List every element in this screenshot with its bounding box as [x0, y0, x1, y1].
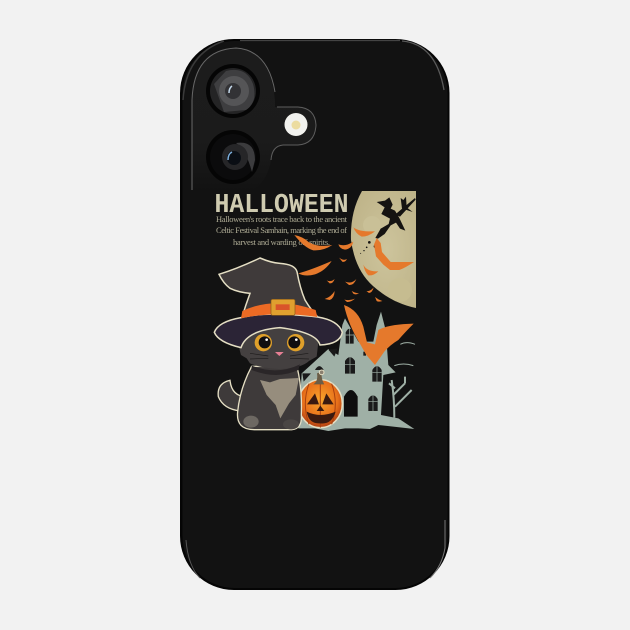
flying witch silhouette	[360, 197, 416, 254]
windows	[302, 329, 382, 411]
cat eyes	[255, 334, 304, 351]
moon	[351, 191, 416, 308]
wisps	[394, 343, 415, 366]
neck shadow	[252, 364, 300, 375]
chest fur	[260, 378, 299, 418]
orange bats over sky	[294, 235, 353, 275]
pumpkin	[298, 370, 342, 428]
description: harvest and warding off spirits.	[233, 237, 330, 247]
hat band	[241, 303, 317, 318]
buckle	[271, 299, 295, 315]
camera island	[192, 48, 316, 192]
window panes	[345, 328, 382, 411]
cat body	[237, 366, 301, 430]
bats on the moon	[353, 227, 414, 275]
upper camera lens	[206, 64, 260, 118]
cat head	[238, 327, 320, 369]
cat tail	[218, 380, 247, 411]
haunted house	[298, 305, 415, 431]
flash	[284, 113, 308, 136]
arched door	[344, 390, 358, 417]
lower camera lens	[206, 130, 260, 184]
hat brim	[214, 314, 342, 348]
dead tree	[389, 377, 412, 418]
phone case body	[180, 39, 450, 590]
whiskers	[250, 353, 309, 359]
paws	[243, 416, 259, 428]
description: Celtic Festival Samhain, marking the end of	[216, 225, 347, 235]
large bat	[344, 305, 414, 365]
title: HALLOWEEN	[214, 191, 348, 221]
cat nose	[275, 352, 284, 356]
description	[216, 214, 348, 247]
description: Halloween's roots trace back to the ancient	[216, 214, 348, 224]
hat crown	[219, 258, 318, 318]
witch cat with hat	[214, 258, 342, 430]
